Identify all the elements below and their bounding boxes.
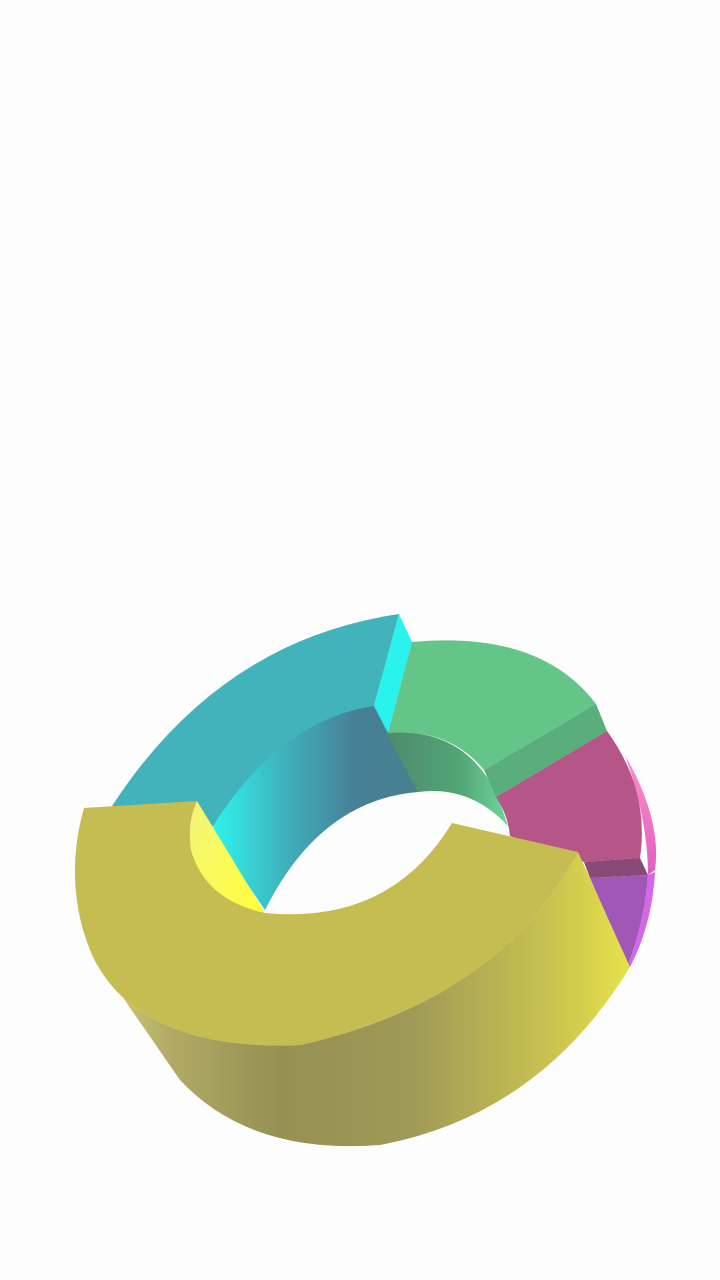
yellow top face (75, 801, 578, 1045)
segment: purple (584, 858, 655, 967)
segment: teal (112, 614, 418, 910)
teal inner wall (210, 704, 418, 910)
teal top face (112, 614, 399, 826)
purple outer edge (628, 872, 655, 967)
magenta top face (496, 731, 642, 862)
green side face (484, 704, 607, 797)
green top face (388, 640, 596, 770)
segment: yellow (75, 801, 630, 1146)
segment: magenta (496, 731, 656, 875)
purple side band (584, 858, 648, 878)
magenta outer side (625, 755, 656, 875)
purple face (590, 875, 648, 965)
segment: green (386, 640, 607, 826)
yellow inner wall (190, 801, 265, 913)
teal side face (374, 614, 412, 733)
yellow outer side (90, 852, 630, 1146)
green inner wall (386, 732, 508, 826)
